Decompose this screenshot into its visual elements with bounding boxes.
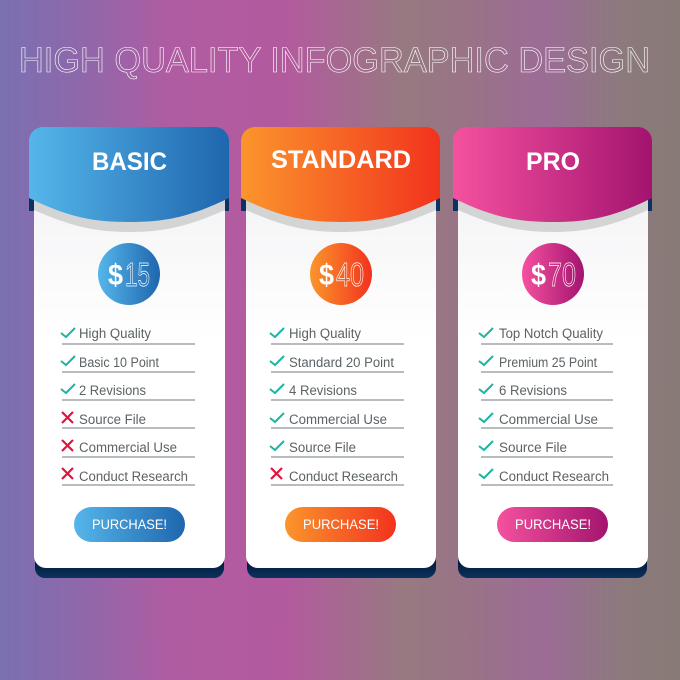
card shadow base bbox=[458, 500, 647, 578]
purchase button bbox=[285, 507, 396, 542]
price badge: $ bbox=[319, 259, 334, 292]
feature list bbox=[479, 326, 613, 485]
feature list: Standard 20 Point bbox=[289, 355, 394, 370]
price badge: $ bbox=[108, 259, 123, 292]
header bbox=[453, 127, 652, 222]
feature list: 2 Revisions bbox=[79, 383, 146, 398]
ribbon tabs bbox=[29, 197, 229, 211]
feature list bbox=[270, 326, 404, 485]
title: HIGH QUALITY INFOGRAPHIC DESIGN bbox=[19, 41, 650, 80]
card body bbox=[458, 190, 648, 568]
header shadow band bbox=[246, 190, 436, 232]
heading: pro: PRO bbox=[526, 148, 580, 176]
card shadow base bbox=[35, 500, 224, 578]
purchase button: PURCHASE! bbox=[303, 517, 379, 532]
header bbox=[241, 127, 440, 222]
feature list: Source File bbox=[79, 412, 146, 427]
feature list: 6 Revisions bbox=[499, 383, 567, 398]
feature list: High Quality bbox=[289, 326, 361, 341]
panel: standard plan bbox=[241, 127, 440, 578]
heading: basic: BASIC bbox=[92, 148, 167, 176]
feature list bbox=[61, 326, 195, 485]
feature list: Top Notch Quality bbox=[499, 326, 603, 341]
price badge: $ bbox=[531, 259, 546, 292]
feature list: Commercial Use bbox=[499, 412, 598, 427]
ribbon tabs bbox=[241, 197, 440, 211]
purchase button bbox=[497, 507, 608, 542]
purchase button bbox=[74, 507, 185, 542]
feature list: Conduct Research bbox=[79, 469, 188, 484]
price badge: 40 bbox=[336, 256, 364, 293]
price badge bbox=[310, 243, 372, 305]
card body bbox=[246, 190, 436, 568]
feature list: Commercial Use bbox=[289, 412, 387, 427]
feature list: Source File bbox=[499, 440, 567, 455]
purchase button: PURCHASE! bbox=[515, 517, 591, 532]
heading: standard: STANDARD bbox=[271, 146, 411, 174]
price badge bbox=[522, 243, 584, 305]
feature list: Basic 10 Point bbox=[79, 355, 159, 370]
panel: pro plan bbox=[453, 127, 652, 578]
feature list: Conduct Research bbox=[289, 469, 398, 484]
card shadow base bbox=[247, 500, 436, 578]
feature list: Premium 25 Point bbox=[499, 355, 597, 370]
price badge bbox=[98, 243, 160, 305]
card body bbox=[34, 190, 225, 568]
feature list: Source File bbox=[289, 440, 356, 455]
feature list: 4 Revisions bbox=[289, 383, 357, 398]
purchase button: PURCHASE! bbox=[92, 517, 167, 532]
price badge: 70 bbox=[548, 256, 576, 293]
header bbox=[29, 127, 229, 222]
header shadow band bbox=[458, 190, 648, 232]
feature list: Commercial Use bbox=[79, 440, 177, 455]
panel: basic plan bbox=[29, 127, 229, 578]
header shadow band bbox=[34, 190, 225, 232]
price badge: 15 bbox=[125, 256, 150, 293]
feature list: High Quality bbox=[79, 326, 151, 341]
feature list: Conduct Research bbox=[499, 469, 609, 484]
ribbon tabs bbox=[453, 197, 652, 211]
